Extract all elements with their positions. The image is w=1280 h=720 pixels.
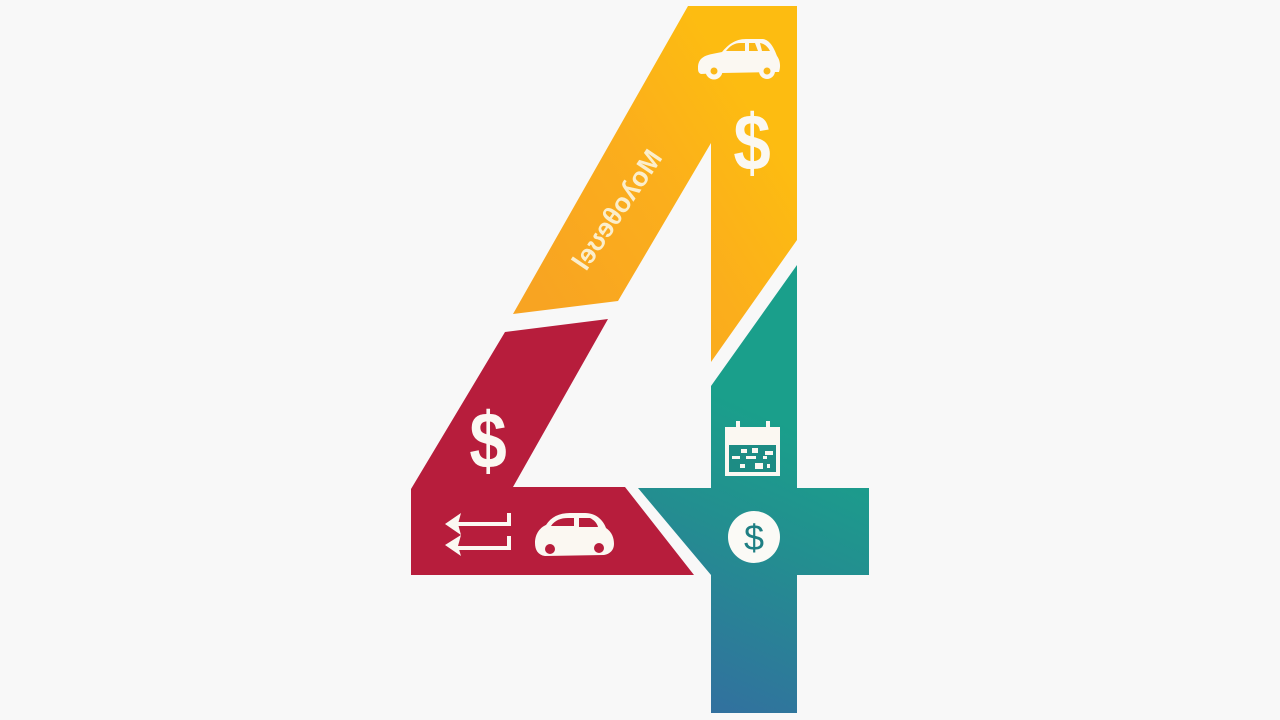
icon: dollar coin: $ [744, 517, 764, 558]
icon: exchange arrows [445, 513, 509, 556]
icon: dollar on red: $ [469, 395, 507, 485]
icon: dollar coin [728, 511, 780, 563]
panel: yellow upper segment [513, 6, 797, 362]
panel: red lower-left segment [411, 319, 694, 575]
text: rotated label: lɘʊɘθoʎoM [566, 144, 668, 275]
icon: dollar on yellow: $ [733, 97, 771, 187]
icon: car on red [535, 513, 614, 556]
icon: car on yellow [698, 39, 780, 80]
panel: teal-blue right segment [638, 265, 869, 713]
icon: calendar [725, 421, 780, 476]
